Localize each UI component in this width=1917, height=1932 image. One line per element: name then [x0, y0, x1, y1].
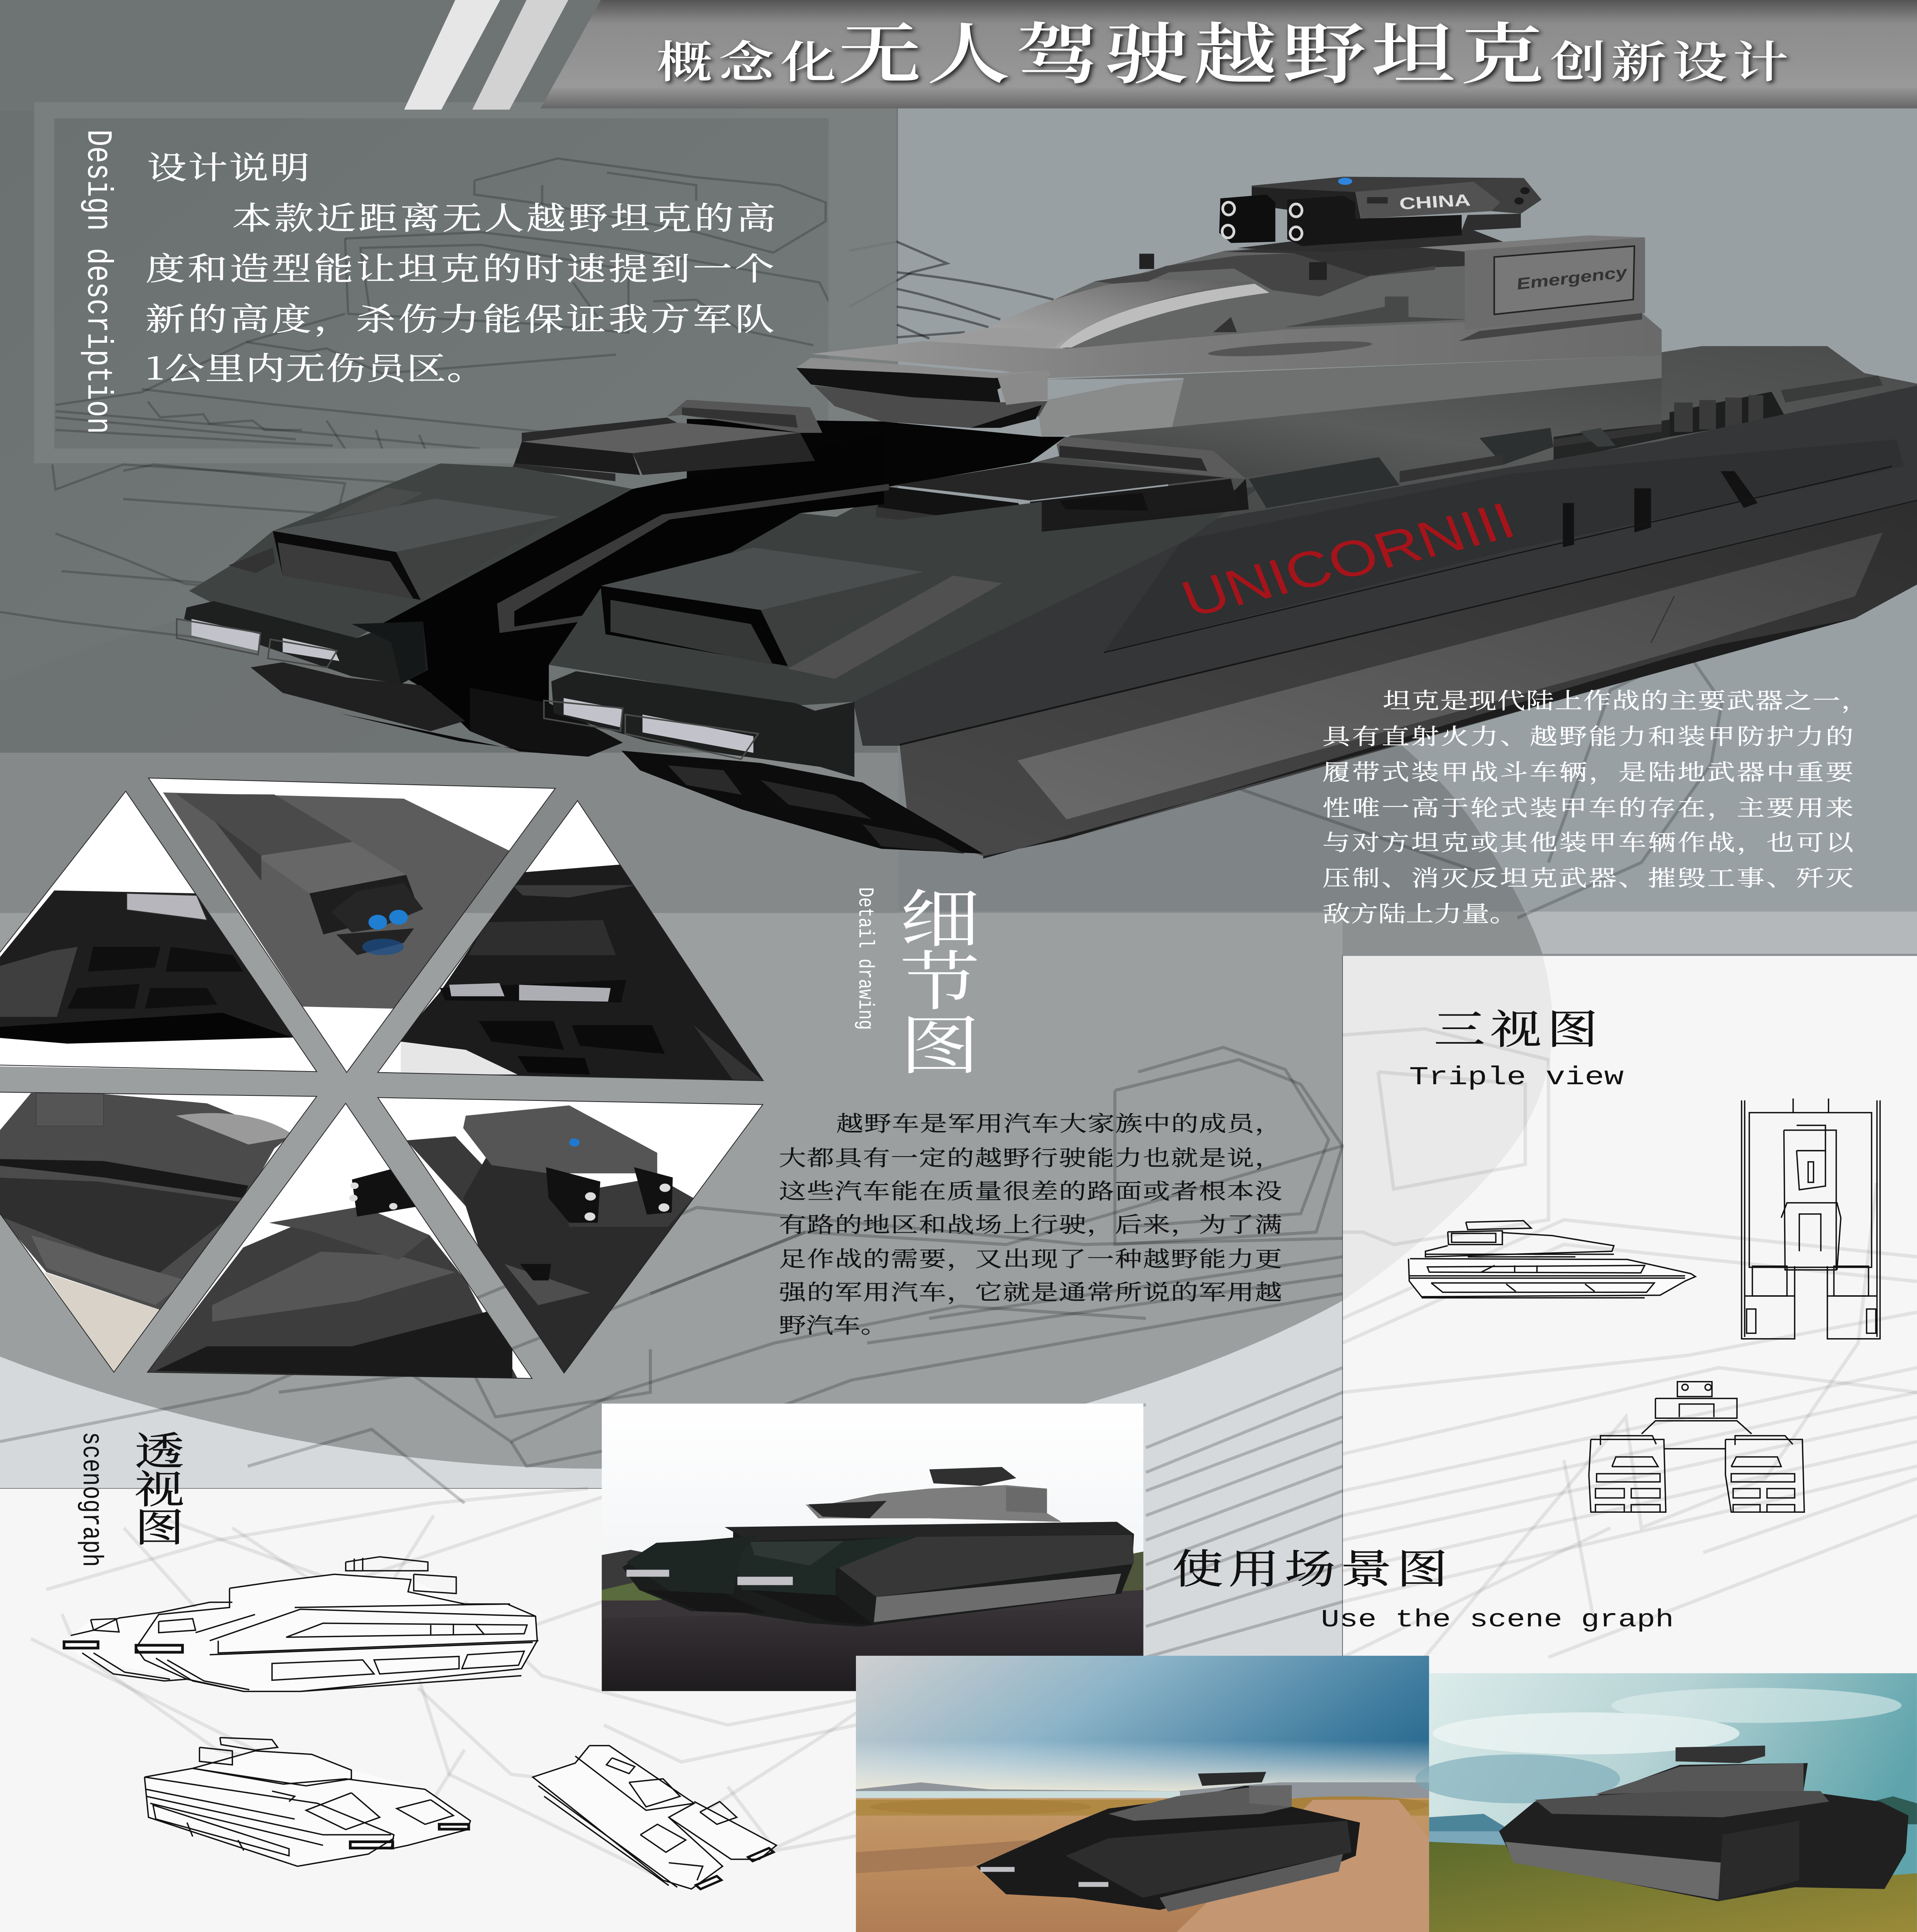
triangle: underside front	[0, 791, 317, 1071]
tank lettering	[1174, 191, 1630, 628]
deck boxes and rails	[1056, 437, 1246, 479]
text block: design description: 新的高度，杀伤力能保证我方军队	[146, 294, 774, 339]
lower tracks	[621, 751, 983, 854]
black space between hulls	[381, 433, 884, 757]
photo tank: volcanic scene	[622, 1467, 1134, 1627]
rear track	[251, 662, 465, 731]
under nose	[814, 386, 1048, 428]
triangle: rear sensor	[148, 778, 555, 1073]
scenograph heading: 视	[135, 1458, 184, 1515]
nose slope to hull join	[779, 486, 1261, 702]
photo: desert scene	[856, 1656, 1429, 1932]
detail drawing heading	[852, 867, 980, 1087]
rear nose	[189, 463, 633, 638]
skirt	[900, 500, 1917, 856]
dome	[980, 279, 1255, 349]
title: 无人驾驶越野坦克	[838, 1, 1544, 97]
text block: off-road vehicle: 强的军用汽车，它就是通常所说的军用越	[779, 1276, 1282, 1306]
perspective view: front left	[64, 1557, 538, 1691]
text block: off-road vehicle: 大都具有一定的越野行驶能力也就是说，	[779, 1141, 1282, 1172]
gun unit	[1219, 177, 1541, 252]
text block: tank introduction: 与对方坦克或其他装甲车辆作战，也可以	[1322, 825, 1855, 857]
text block: tank introduction: 压制、消灭反坦克武器、摧毁工事、歼灭	[1322, 861, 1854, 892]
hatch plates	[1225, 243, 1468, 276]
base plinth	[1045, 355, 1662, 427]
text block: tank introduction: 履带式装甲战斗车辆，是陆地武器中重要	[1322, 754, 1854, 786]
triple view heading	[1409, 997, 1624, 1092]
photo: volcanic scene	[602, 1404, 1143, 1691]
detail drawing heading: 图	[900, 995, 980, 1087]
panel: triple view backdrop	[1342, 955, 1917, 1932]
title bar	[541, 0, 1917, 109]
text block: tank introduction: 具有直射火力、越野能力和装甲防护力的	[1322, 719, 1854, 751]
perspective view: top	[533, 1746, 776, 1889]
design description label: Design description	[78, 129, 118, 434]
scenograph heading	[75, 1420, 184, 1567]
scenograph heading: 透	[135, 1420, 184, 1476]
nose	[796, 358, 1051, 378]
text block: design description: 本款近距离无人越野坦克的高	[232, 194, 776, 238]
scenograph heading: scenograph	[75, 1432, 107, 1567]
front view	[1589, 1382, 1804, 1512]
detail drawing heading: Detail drawing	[852, 887, 877, 1030]
scene graph heading	[1172, 1537, 1674, 1634]
header stripes	[404, 0, 568, 110]
triangle: side hull	[0, 1091, 317, 1375]
rear deck box	[667, 400, 822, 433]
photo tank: desert scene	[976, 1772, 1360, 1912]
text block: design description: 1公里内无伤员区。	[146, 344, 486, 389]
detail drawing heading: 节	[900, 930, 980, 1022]
text block: off-road vehicle: 有路的地区和战场上行驶，后来，为了满	[779, 1208, 1282, 1239]
top view	[1742, 1099, 1880, 1339]
ghost wireframe: main tank behind description	[0, 158, 829, 643]
main tank: turret and deck	[687, 177, 1662, 532]
black mass between hulls	[687, 419, 1065, 488]
triangle: front right	[378, 801, 766, 1083]
triple view heading: Triple view	[1409, 1063, 1624, 1092]
text block: design description	[146, 143, 776, 389]
front nose	[549, 502, 1042, 706]
photo: grassland scene	[1415, 1673, 1917, 1932]
main tank: hull side and skirt	[621, 346, 1917, 859]
text block: design description: 度和造型能让坦克的时速提到一个	[146, 244, 774, 289]
photo tank: grassland scene	[1499, 1746, 1908, 1901]
triangle outlines	[0, 778, 763, 1378]
ghost wireframe: turret arcs behind tank	[849, 242, 1053, 338]
title: 概念化	[657, 27, 836, 90]
text block: tank introduction: 性唯一高于轮式装甲车的存在，主要用来	[1322, 790, 1854, 822]
deck	[1020, 346, 1917, 527]
text block: off-road vehicle: 越野车是军用汽车大家族中的成员，	[836, 1107, 1282, 1138]
perspective view: rear right	[145, 1738, 470, 1866]
deck surface	[1065, 378, 1662, 478]
main tank: twin noses	[177, 400, 1042, 777]
text block: tank introduction: 坦克是现代陆上作战的主要武器之一，	[1383, 683, 1869, 715]
triple view drawings	[1408, 1099, 1880, 1512]
scene graph heading: Use the scene graph	[1321, 1606, 1674, 1634]
triangle: dome close-up	[148, 1103, 532, 1378]
text block: off-road vehicle: 足作战的需要，又出现了一种越野能力更	[779, 1242, 1282, 1273]
triple view heading: 三视图	[1434, 997, 1598, 1056]
tank lettering: UNICORNIII	[1174, 492, 1523, 628]
title: 创新设计	[1550, 27, 1788, 90]
tank lettering: CHINA	[1398, 191, 1471, 213]
detail drawing heading: 细	[900, 867, 980, 960]
text block: tank introduction: 敌方陆上力量。	[1322, 896, 1517, 928]
triangle: top of turret	[378, 1098, 763, 1375]
text block: off-road vehicle: 这些汽车能在质量很差的路面或者根本没	[779, 1174, 1282, 1205]
mid turret body	[983, 242, 1468, 350]
tank lettering: Emergency	[1515, 263, 1630, 293]
turret block with Emergency plate	[1412, 235, 1645, 252]
scenograph heading: 图	[135, 1497, 184, 1553]
text block: off-road vehicle	[779, 1107, 1282, 1340]
panel: design description frame	[34, 102, 896, 463]
scene graph heading: 使用场景图	[1172, 1537, 1448, 1595]
title	[657, 1, 1788, 97]
upper plate	[811, 313, 1662, 378]
perspective line drawings	[64, 1557, 776, 1889]
background: large curved grey shape	[0, 530, 1553, 1469]
text block: tank introduction	[1322, 683, 1869, 928]
detail triangles hexagon	[0, 778, 766, 1378]
text block: design description: 设计说明	[147, 143, 310, 188]
side view	[1408, 1221, 1696, 1298]
side hull	[853, 385, 1917, 746]
ghost wireframe: lower tank linework	[0, 653, 1917, 1873]
text block: off-road vehicle: 野汽车。	[779, 1309, 888, 1340]
